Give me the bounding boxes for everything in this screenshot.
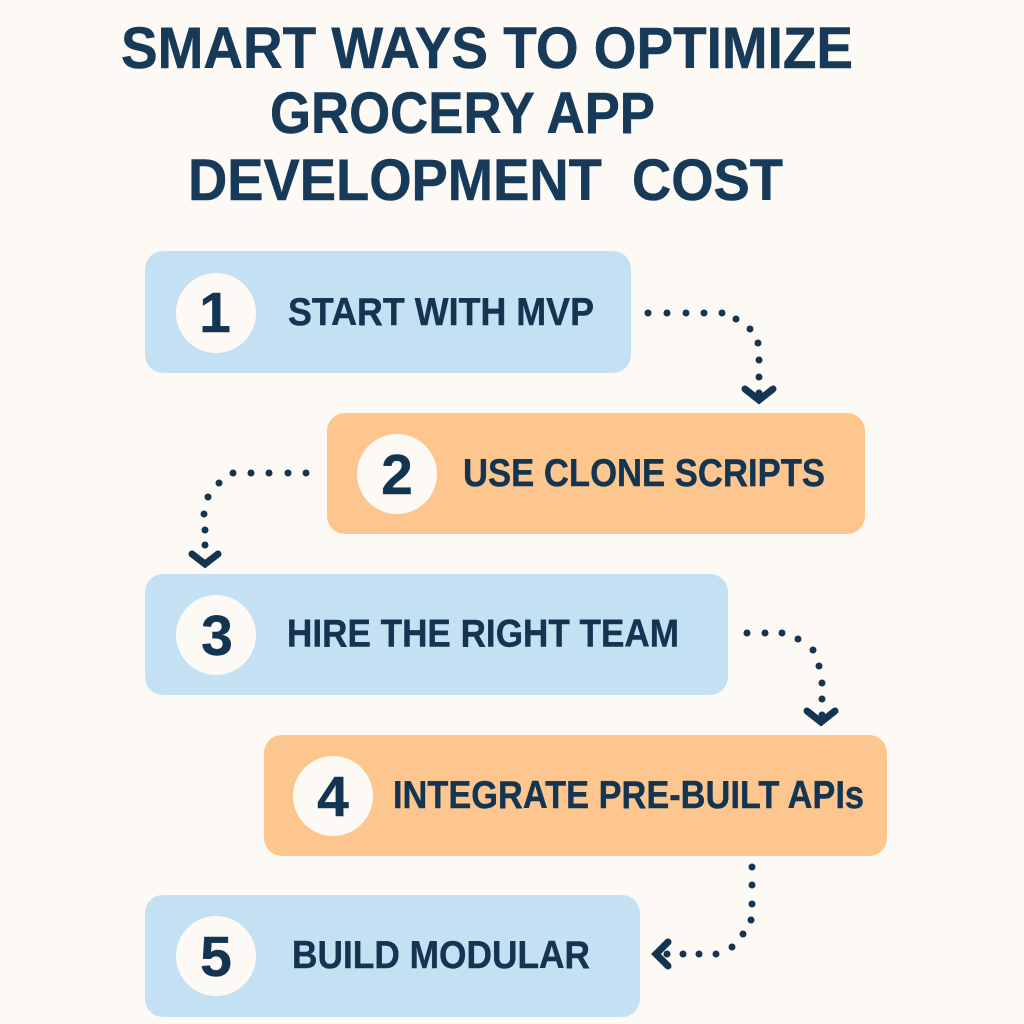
arrow: step 1 to step 2 <box>644 310 773 400</box>
panel: step 1 start with MVP <box>145 251 631 373</box>
panel: step 4 integrate pre-built APIs: 4 <box>317 765 349 829</box>
panel: step 3 hire the right team <box>145 574 728 695</box>
arrow: step 2 to step 3 <box>192 470 310 564</box>
title <box>121 16 853 213</box>
panel: step 1 start with MVP: START WITH MVP <box>288 291 594 334</box>
panel: step 3 hire the right team: HIRE THE RIGHT TEAM <box>287 612 679 656</box>
panel: step 2 use clone scripts: 2 <box>381 443 413 507</box>
panel: step 1 start with MVP: 1 <box>199 281 231 345</box>
panel: step 4 integrate pre-built APIs <box>264 735 887 856</box>
panel: step 2 use clone scripts: USE CLONE SCRIPTS <box>463 452 825 495</box>
arrow: step 3 to step 4 <box>744 630 835 722</box>
panel: step 3 hire the right team: 3 <box>201 604 233 668</box>
title: DEVELOPMENT COST <box>188 148 783 213</box>
panel: step 5 build modular: 5 <box>200 925 232 989</box>
panel: step 2 use clone scripts <box>327 413 865 534</box>
title: SMART WAYS TO OPTIMIZE <box>121 16 853 81</box>
panel: step 5 build modular <box>145 895 640 1017</box>
panel: step 5 build modular: BUILD MODULAR <box>292 934 590 977</box>
panel: step 4 integrate pre-built APIs: INTEGRATE PRE-BUILT APIs <box>393 774 864 817</box>
title: GROCERY APP <box>270 81 655 146</box>
arrow: step 4 to step 5 <box>656 864 756 966</box>
